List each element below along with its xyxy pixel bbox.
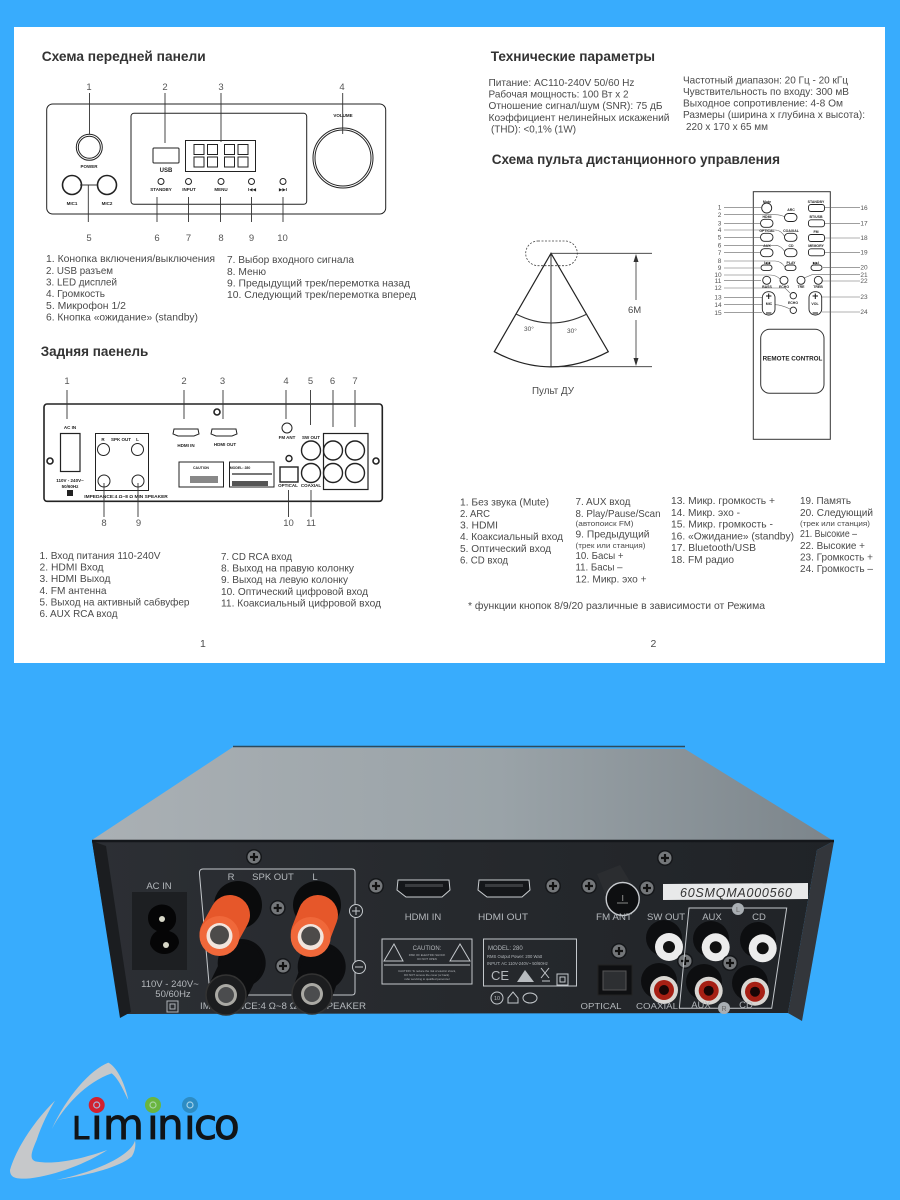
diagram: remote range cone: 6M xyxy=(628,305,641,316)
logo swoosh xyxy=(10,1063,135,1180)
logo wordmark: m xyxy=(103,1100,144,1149)
speaker output block: SPK OUT xyxy=(252,872,294,883)
diagram: front panel: 3 xyxy=(218,82,224,93)
diagram: remote control: MEMORY xyxy=(808,244,824,248)
diagram: rear panel: 6 xyxy=(330,376,335,387)
diagram: remote control: 3 xyxy=(718,220,722,228)
RCA jack: SW OUT xyxy=(646,920,683,961)
diagram: remote control: 23 xyxy=(860,294,868,301)
RCA jack: CD red xyxy=(732,965,769,1006)
HDMI OUT port xyxy=(478,880,530,923)
RCA input frame: SW OUT xyxy=(647,912,685,923)
panel: manual page xyxy=(14,27,885,663)
diagram: remote control: 12 xyxy=(714,285,722,292)
RCA input frame xyxy=(580,903,787,1014)
diagram: front panel: ▶▶I xyxy=(279,187,287,192)
text block: remote legend: 21. Высокие – xyxy=(800,528,857,540)
diagram: rear panel: 11 xyxy=(306,518,316,529)
caution label: DO NOT OPEN xyxy=(417,957,437,961)
diagram: front panel xyxy=(47,82,386,244)
RCA jack: CD white xyxy=(740,922,777,962)
diagram: front panel: STANDBY xyxy=(150,187,172,192)
diagram: remote control: TRE xyxy=(798,285,805,289)
RCA input frame: CD xyxy=(739,1000,753,1011)
diagram: remote control: TREB xyxy=(813,285,823,289)
text block: specifications: Размеры (ширина х глубина х высота): xyxy=(683,109,865,121)
binding post: left black xyxy=(292,943,346,1014)
diagram: remote control: CD xyxy=(788,244,794,248)
diagram: remote control: 19 xyxy=(860,250,868,256)
logo wordmark: o xyxy=(214,1100,240,1149)
FM antenna connector xyxy=(596,865,639,923)
diagram: front panel: MIC1 xyxy=(67,201,78,206)
text block: remote legend: 17. Bluetooth/USB xyxy=(671,542,756,554)
diagram: remote control: 9 xyxy=(718,265,722,272)
text block: rear panel legend: 6. AUX RCA вход xyxy=(40,608,118,620)
heading: rear panel: Задняя паенель xyxy=(41,343,149,359)
text block: remote legend: (автопоиск FM) xyxy=(576,519,634,528)
page number 1: 1 xyxy=(200,638,206,650)
diagram: remote control: 13 xyxy=(714,294,722,302)
logo wordmark: L xyxy=(72,1111,90,1147)
diagram: remote control: 10 xyxy=(714,272,722,279)
text block: specifications xyxy=(488,74,865,136)
text block: rear panel legend: 1. Вход питания 110-240V xyxy=(40,550,160,562)
amplifier rear face xyxy=(92,841,834,1014)
diagram: rear panel: 7 xyxy=(352,376,358,387)
diagram: remote control: COAXIAL xyxy=(783,229,800,233)
diagram: remote control: 17 xyxy=(860,220,868,228)
text block: rear panel legend: 7. CD RCA вход xyxy=(221,551,292,563)
RCA jack: COAXIAL xyxy=(641,963,678,1004)
diagram: rear panel: MODEL: 280 xyxy=(230,466,250,470)
diagram: remote control: PLAY xyxy=(786,261,796,265)
text block: rear panel legend: 3. HDMI Выход xyxy=(40,573,110,585)
diagram: remote control: 15 xyxy=(714,310,722,317)
text block: remote legend: 7. AUX вход xyxy=(576,496,630,508)
diagram: front panel: 10 xyxy=(277,233,288,244)
caution label: refer servicing to qualified personnel xyxy=(405,977,450,981)
text block: remote legend: (трек или станция) xyxy=(800,519,871,528)
diagram: front panel: USB xyxy=(160,168,173,174)
diagram: rear panel: 110V - 240V~ xyxy=(56,478,84,483)
text block: specifications: (THD): <0,1% (1W) xyxy=(491,124,576,136)
HDMI IN port xyxy=(397,880,450,923)
text block: specifications: Выходное сопротивление: 4-8 Ом xyxy=(683,98,843,110)
text block: rear panel legend: 9. Выход на левую колонку xyxy=(221,574,349,586)
diagram: rear panel: 9 xyxy=(136,518,141,529)
speaker output block: R xyxy=(228,872,235,883)
photo: amplifier rear xyxy=(92,746,834,1021)
diagram: rear panel: 4 xyxy=(283,376,289,387)
diagram: front panel: INPUT xyxy=(182,187,196,192)
RCA input frame: R xyxy=(721,1006,727,1013)
logo wordmark: i xyxy=(91,1100,103,1149)
text block: front panel legend: 3. LED дисплей xyxy=(46,276,117,288)
diagram: remote control: 24 xyxy=(860,309,868,316)
diagram: rear panel: CAUTION xyxy=(193,466,209,470)
diagram: remote control: 16 xyxy=(860,205,868,212)
AC IN socket: AC IN xyxy=(146,881,172,892)
diagram: front panel: 2 xyxy=(162,82,168,93)
text block: rear panel legend: 4. FM антенна xyxy=(40,585,107,597)
text block: rear panel legend: 8. Выход на правую колонку xyxy=(221,562,355,574)
text block: front panel legend: 7. Выбор входного сигнала xyxy=(227,254,354,266)
text block: remote legend: 3. HDMI xyxy=(460,520,498,532)
RCA input frame: OPTICAL xyxy=(580,1001,622,1011)
diagram: front panel: I◀◀ xyxy=(248,187,257,192)
text block: remote legend: 18. FM радио xyxy=(671,554,734,566)
text block: front panel legend xyxy=(46,253,416,324)
text block: remote legend: 23. Громкость + xyxy=(800,552,873,564)
diagram: remote range cone: 30° xyxy=(524,325,534,333)
text block: remote legend: 13. Микр. громкость + xyxy=(671,495,775,507)
text block: front panel legend: 1. Конопка включения/выключения xyxy=(46,253,215,265)
text block: front panel legend: 5. Микрофон 1/2 xyxy=(46,300,126,312)
diagram: rear panel: R xyxy=(101,437,105,442)
logo wordmark: c xyxy=(194,1100,217,1149)
diagram: front panel: MENU xyxy=(214,187,228,192)
diagram: rear panel: 50/60Hz xyxy=(62,484,79,489)
diagram: rear panel: FM ANT xyxy=(279,435,296,440)
text block: specifications: Питание: AC110-240V 50/60 Hz xyxy=(488,77,634,89)
heading: front panel: Схема передней панели xyxy=(42,48,206,64)
HDMI OUT port: HDMI OUT xyxy=(478,912,528,923)
diagram: remote range cone xyxy=(494,241,652,397)
optical port xyxy=(598,965,632,995)
diagram: remote control: I◀◀ xyxy=(764,261,770,265)
logo wordmark: i xyxy=(184,1100,196,1149)
diagram: remote control: 14 xyxy=(714,302,722,309)
text block: specifications: Отношение сигнал/шум (SNR): 75 дБ xyxy=(488,100,663,112)
text block: specifications: Рабочая мощность: 100 Вт x 2 xyxy=(488,88,629,100)
diagram: remote control: 6 xyxy=(718,242,722,250)
diagram: remote control: 18 xyxy=(860,235,868,242)
amplifier side edges xyxy=(92,841,834,1021)
model label: INPUT: AC 110V-240V~ 50/60Hz xyxy=(487,961,548,966)
diagram: remote range cone: 30° xyxy=(567,327,577,335)
caution label: DO NOT remove the cover (or back). xyxy=(404,973,450,977)
diagram: remote control: 21 xyxy=(860,272,868,279)
diagram: remote control: HDMI xyxy=(763,215,771,219)
binding post: right black xyxy=(206,939,266,1015)
diagram: remote control xyxy=(714,192,868,439)
text block: remote legend: 19. Память xyxy=(800,495,851,507)
RCA jack: AUX red xyxy=(686,964,723,1005)
speaker output block: L xyxy=(312,872,318,883)
text block: rear panel legend: 10. Оптический цифровой вход xyxy=(221,586,368,598)
diagram: remote control: 11 xyxy=(715,278,722,285)
text block: remote legend: 24. Громкость – xyxy=(800,563,873,575)
diagram: remote control: 22 xyxy=(860,278,868,285)
diagram: rear panel: IMPEDANCE:4 Ω~8 Ω MIN SPEAKER xyxy=(84,494,168,500)
model label: 10 xyxy=(494,996,500,1002)
AC IN socket: 50/60Hz xyxy=(155,989,191,1000)
caution label: RISK OF ELECTRIC SHOCK xyxy=(409,953,445,957)
text block: remote legend: 15. Микр. громкость - xyxy=(671,518,773,530)
diagram: rear panel: AC IN xyxy=(64,425,76,430)
diagram: rear panel: 3 xyxy=(220,376,225,387)
diagram: front panel: 9 xyxy=(249,233,254,244)
model label: RMS Output Power: 200 Watt xyxy=(487,954,543,959)
text block: remote legend: 8. Play/Pause/Scan xyxy=(576,508,661,520)
diagram: remote control: 4 xyxy=(718,227,722,234)
model label: CE xyxy=(491,968,509,983)
screws xyxy=(246,849,738,974)
diagram: remote control: 8 xyxy=(718,258,722,265)
diagram: front panel: 1 xyxy=(86,82,92,93)
diagram: rear panel: 2 xyxy=(181,376,187,387)
model label: MODEL: 280 xyxy=(488,946,523,952)
diagram: front panel: 6 xyxy=(154,233,160,244)
diagram: rear panel: 8 xyxy=(101,518,107,529)
serial number label: 60SMQMA000560 xyxy=(680,886,792,900)
diagram: rear panel xyxy=(44,376,382,529)
text block: remote legend xyxy=(460,495,873,586)
diagram: front panel: 8 xyxy=(218,233,224,244)
speaker output block xyxy=(199,869,367,1011)
diagram: remote control: 5 xyxy=(718,234,722,242)
text block: remote legend: 9. Предыдущий xyxy=(576,528,650,540)
footnote: * функции кнопок 8/9/20 различные в зависимости от Режима xyxy=(468,600,765,612)
text block: remote legend: 14. Микр. эхо - xyxy=(671,507,740,519)
diagram: rear panel: OPTICAL xyxy=(278,483,298,488)
RCA input frame: L xyxy=(736,907,740,914)
text block: remote legend: 10. Басы + xyxy=(576,550,624,562)
diagram: rear panel: COAXIAL xyxy=(301,483,321,488)
diagram: remote control: 7 xyxy=(718,250,722,257)
page number 2: 2 xyxy=(650,638,656,650)
AC IN socket xyxy=(132,881,199,1012)
text block: remote legend: 22. Высокие + xyxy=(800,540,865,552)
text block: remote legend: 20. Следующий xyxy=(800,507,873,519)
diagram: front panel: 4 xyxy=(339,82,345,93)
text block: specifications: Частотный диапазон: 20 Гц - 20 кГц xyxy=(683,74,848,86)
diagram: rear panel: SPK OUT xyxy=(111,437,131,442)
text block: front panel legend: 9. Предыдущий трек/перемотка назад xyxy=(227,278,410,290)
text block: rear panel legend xyxy=(40,550,381,620)
diagram: remote control: Mute xyxy=(763,200,771,204)
diagram: remote control: MIC xyxy=(766,302,773,306)
text block: specifications: Коэффициент нелинейных искажений xyxy=(488,112,670,124)
logo wordmark: i xyxy=(147,1100,159,1149)
model label xyxy=(484,939,576,1004)
diagram: remote control: 20 xyxy=(860,264,868,272)
diagram: remote control: FM xyxy=(813,230,819,234)
speaker output block: IMPEDANCE:4 Ω~8 Ω MIN SPEAKER xyxy=(200,1001,367,1011)
logo wordmark: n xyxy=(157,1100,184,1149)
diagram: front panel: VOLUME xyxy=(333,113,353,118)
RCA input frame: AUX xyxy=(702,912,722,923)
HDMI IN port: HDMI IN xyxy=(405,912,441,923)
text block: specifications: 220 x 170 x 65 мм xyxy=(686,121,768,133)
diagram: remote range cone: Пульт ДУ xyxy=(532,385,574,397)
RCA input frame: COAXIAL xyxy=(636,1001,678,1011)
heading: technical parameters: Технические параметры xyxy=(491,48,655,64)
binding post: right orange xyxy=(200,881,262,956)
text block: remote legend: 4. Коаксиальный вход xyxy=(460,531,563,543)
caution label xyxy=(382,939,472,984)
diagram: rear panel: HDMI IN xyxy=(177,443,195,448)
text block: front panel legend: 2. USB разъем xyxy=(46,265,113,277)
diagram: rear panel: SW OUT xyxy=(302,435,320,440)
diagram: remote control: BASS xyxy=(762,285,773,289)
text block: front panel legend: 10. Следующий трек/перемотка вперед xyxy=(227,289,416,301)
caution label: CAUTION: xyxy=(413,946,442,952)
text block: remote legend: 16. «Ожидание» (standby) xyxy=(671,530,794,542)
diagram: front panel: 5 xyxy=(86,233,92,244)
screws over RCA xyxy=(677,953,738,971)
diagram: remote control: ARC xyxy=(787,208,795,212)
RCA input frame: AUX xyxy=(691,1000,711,1011)
text block: remote legend: 6. CD вход xyxy=(460,554,508,566)
text block: remote legend: 12. Микр. эхо + xyxy=(576,574,646,586)
diagram: remote control: STANDBY xyxy=(808,200,825,204)
diagram: remote control: AUX xyxy=(763,244,771,248)
diagram: front panel: MIC2 xyxy=(102,201,113,206)
diagram: rear panel: 5 xyxy=(308,376,313,387)
diagram: rear panel: HDMI OUT xyxy=(214,442,236,447)
logo dots xyxy=(89,1097,198,1113)
diagram: remote control: ECHO xyxy=(779,285,789,289)
diagram: remote control: ▶▶I xyxy=(813,261,819,265)
AC IN socket: 110V - 240V~ xyxy=(141,979,199,990)
text block: remote legend: 1. Без звука (Mute) xyxy=(460,496,549,508)
heading: remote control scheme: Схема пульта дистанционного управления xyxy=(492,151,780,167)
serial number label xyxy=(663,883,808,900)
text block: front panel legend: 6. Кнопка «ожидание» (standby) xyxy=(46,312,198,324)
diagram: remote control: 1 xyxy=(718,204,722,212)
diagram: remote control: ECHO xyxy=(788,301,798,305)
diagram: remote control: OPTICAL xyxy=(759,229,776,233)
diagram: remote control: REMOTE CONTROL xyxy=(763,356,823,362)
text block: rear panel legend: 5. Выход на активный сабвуфер xyxy=(40,596,190,608)
diagram: front panel: POWER xyxy=(80,164,98,169)
text block: front panel legend: 8. Меню xyxy=(227,266,266,278)
RCA input frame: CD xyxy=(752,912,766,923)
diagram: remote control: VOL xyxy=(811,302,819,306)
logo: Liminico xyxy=(10,1063,240,1180)
text block: remote legend: 2. ARC xyxy=(460,508,490,520)
text block: remote legend: (трек или станция) xyxy=(576,541,646,550)
binding post: left orange xyxy=(291,881,341,957)
text block: rear panel legend: 11. Коаксиальный цифровой вход xyxy=(221,598,381,610)
diagram: remote control: 2 xyxy=(718,212,722,219)
text block: specifications: Чувствительность по входу: 300 мВ xyxy=(683,86,849,98)
diagram: rear panel: 1 xyxy=(64,376,70,387)
diagram: remote control: BT/USB xyxy=(809,215,823,219)
diagram: rear panel: L xyxy=(136,437,139,442)
text block: rear panel legend: 2. HDMI Вход xyxy=(40,562,104,574)
RCA jack: AUX white xyxy=(693,921,730,961)
text block: remote legend: 11. Басы – xyxy=(576,562,623,574)
text block: front panel legend: 4. Громкость xyxy=(46,288,106,300)
caution label: CAUTION: To reduce the risk of electric shock, xyxy=(398,969,456,973)
text block: remote legend: 5. Оптический вход xyxy=(460,543,551,555)
amplifier top cover xyxy=(92,746,832,840)
diagram: rear panel: 10 xyxy=(283,518,294,529)
FM antenna connector: FM ANT xyxy=(596,912,632,923)
diagram: front panel: 7 xyxy=(186,233,191,244)
